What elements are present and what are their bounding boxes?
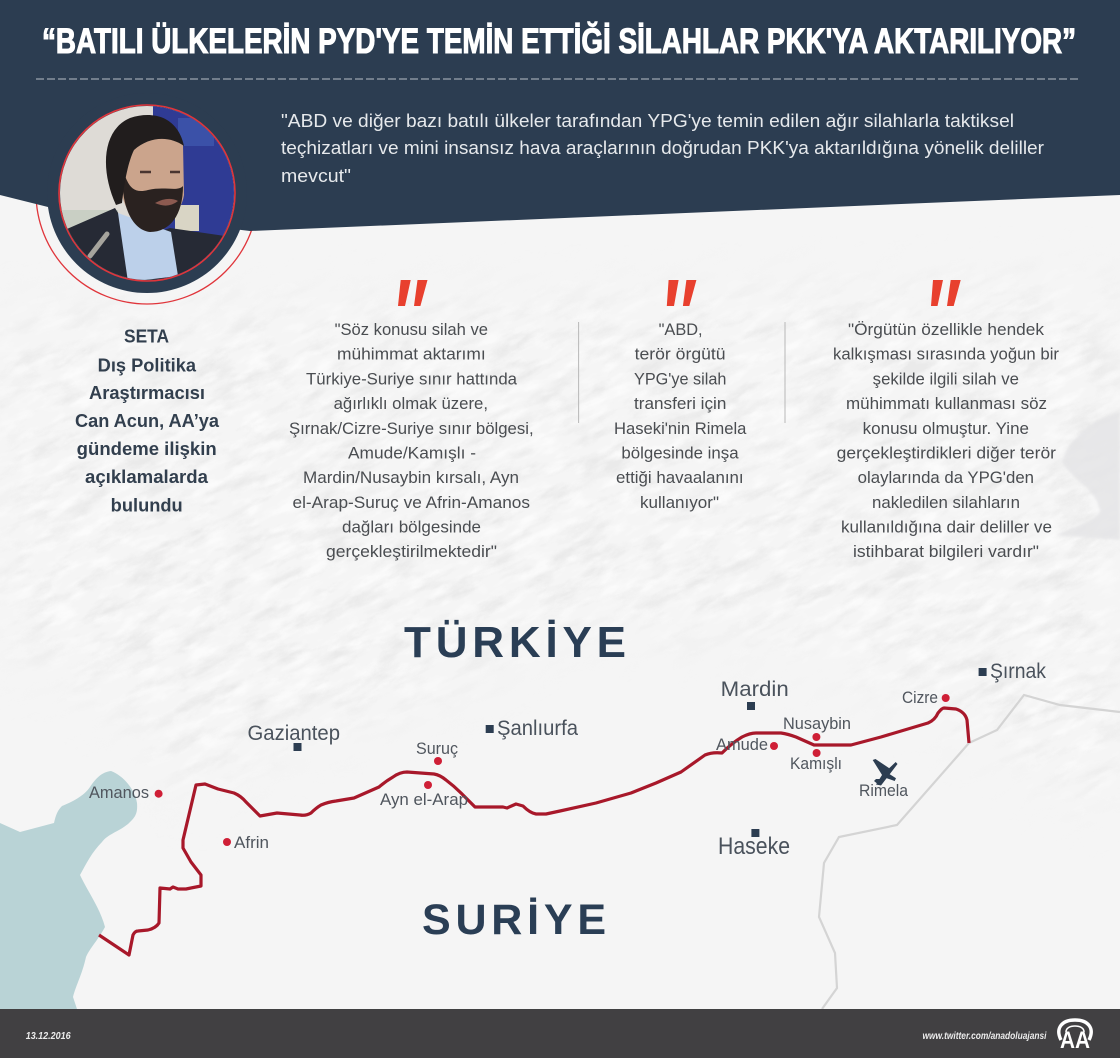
city: Haseke: Haseke: [718, 833, 790, 860]
point: Kamışlı: Kamışlı: [790, 755, 842, 773]
point: Cizre: Cizre: [902, 689, 938, 707]
speaker caption: SETA: [124, 327, 169, 347]
quote column 2: "ABD,: [659, 321, 703, 339]
twitter url: www.twitter.com/anadoluajansi: [922, 1031, 1047, 1042]
point: Ayn el-Arap: [380, 781, 468, 809]
speaker caption: Dış Politika: [98, 356, 197, 376]
portrait outer ring: [36, 82, 258, 304]
quote column 2: bölgesinde inşa: [621, 444, 739, 462]
quote column 3: nakledilen silahların: [872, 494, 1020, 512]
face: [122, 138, 184, 208]
quote column 3: konusu olmuştur. Yine: [863, 420, 1029, 438]
icon: quote mark 2: [667, 280, 696, 306]
speaker caption: [75, 327, 220, 516]
speaker caption: Can Acun, AA’ya: [75, 411, 220, 431]
quote column 2: kullanıyor": [640, 494, 719, 512]
quote column 1: Türkiye-Suriye sınır hattında: [306, 370, 518, 388]
mouth: [155, 199, 178, 206]
border lines in grey: [819, 695, 1120, 1009]
lead quote: "ABD ve diğer bazı batılı ülkeler tarafından YPG'ye temin edilen ağır silahlarla taktiksel: [281, 110, 1014, 131]
point: Nusaybin: [783, 715, 851, 741]
quote column 3: olaylarında da YPG'den: [858, 469, 1034, 487]
quote column 1: el-Arap-Suruç ve Afrin-Amanos: [292, 494, 530, 512]
icon: quote mark 1: [398, 280, 428, 306]
speaker caption: açıklamalarda: [85, 467, 209, 487]
lead quote: teçhizatları ve mini insansız hava araçlarının doğrudan PKK'ya aktarıldığına yönelik deliller: [281, 137, 1044, 158]
eyes: [140, 171, 180, 173]
quote column 1: Amude/Kamışlı -: [348, 444, 476, 462]
shirt: [118, 213, 178, 282]
quote column 1: gerçekleştirilmektedir": [326, 543, 497, 561]
quote column 1: Mardin/Nusaybin kırsalı, Ayn: [303, 469, 519, 487]
quote column 1: Şırnak/Cizre-Suriye sınır bölgesi,: [289, 420, 534, 438]
quote column 3: kalkışması sırasında yoğun bir: [833, 346, 1059, 364]
speaker caption: Araştırmacısı: [89, 383, 205, 403]
speaker caption: bulundu: [111, 496, 183, 516]
quote column 1: mühimmat aktarımı: [337, 346, 486, 364]
quote column 3: kullanıldığına dair deliller ve: [841, 519, 1052, 537]
terrain relief texture: [23, 316, 1104, 742]
microphone: [90, 234, 107, 256]
point: Afrin: Afrin: [234, 834, 269, 852]
quote column 3: şekilde ilgili silah ve: [873, 370, 1019, 388]
portrait badge: [47, 93, 247, 293]
header band: [0, 0, 1120, 231]
quote column 1: ağırlıklı olmak üzere,: [334, 395, 488, 413]
point: Amanos: Amanos: [89, 784, 149, 802]
beard: [123, 178, 183, 232]
footer bar: [0, 1009, 1120, 1058]
quote column 2: [614, 280, 747, 512]
border line Türkiye-Suriye: [99, 708, 969, 955]
lead quote: [281, 110, 1044, 186]
quote column 2: terör örgütü: [635, 346, 726, 364]
date: 13.12.2016: [26, 1031, 71, 1042]
icon: airplane at Rimela: [873, 759, 898, 786]
label: Rimela: Rimela: [859, 782, 909, 800]
quote column 1: dağları bölgesinde: [342, 519, 481, 537]
hair: [106, 115, 184, 205]
quote column 3: mühimmatı kullanması söz: [846, 395, 1047, 413]
map background: [0, 316, 1120, 1009]
lake: [1055, 412, 1120, 540]
quote column 3: [833, 280, 1059, 561]
country label: Türkiye: TÜRKİYE: [404, 618, 626, 667]
quote column 2: YPG'ye silah: [634, 370, 726, 388]
point: Amude: Amude: [716, 736, 768, 754]
logo: Anadolu Ajansı: AA: [1060, 1027, 1090, 1054]
quote column 2: ettiği havaalanını: [616, 469, 744, 487]
quote column 1: "Söz konusu silah ve: [335, 321, 488, 339]
quote column 2: transferi için: [634, 395, 726, 413]
quote column 2: Haseki'nin Rimela: [614, 420, 747, 438]
point: Ayn el-Arap: Ayn el-Arap: [380, 791, 468, 809]
lead quote: mevcut": [281, 165, 351, 186]
jacket: [68, 208, 223, 280]
city: Şanlıurfa: Şanlıurfa: [497, 716, 578, 740]
city: Gaziantep: Gaziantep: [248, 721, 340, 745]
speaker caption: gündeme ilişkin: [77, 439, 217, 459]
point: Suruç: Suruç: [416, 740, 458, 758]
country label: Suriye: SURİYE: [422, 896, 606, 944]
sea: [0, 771, 137, 1009]
quote column 3: "Örgütün özellikle hendek: [848, 321, 1045, 339]
quote column 3: gerçekleştirdikleri diğer terör: [837, 444, 1057, 462]
icon: quote mark 3: [931, 280, 961, 306]
quote column 1: [289, 280, 534, 561]
photo: [60, 106, 234, 280]
point: Nusaybin: Nusaybin: [783, 715, 851, 733]
city: Şırnak: Şırnak: [990, 659, 1046, 683]
quote column 3: istihbarat bilgileri vardır": [853, 543, 1039, 561]
city: Mardin: Mardin: [721, 677, 789, 701]
